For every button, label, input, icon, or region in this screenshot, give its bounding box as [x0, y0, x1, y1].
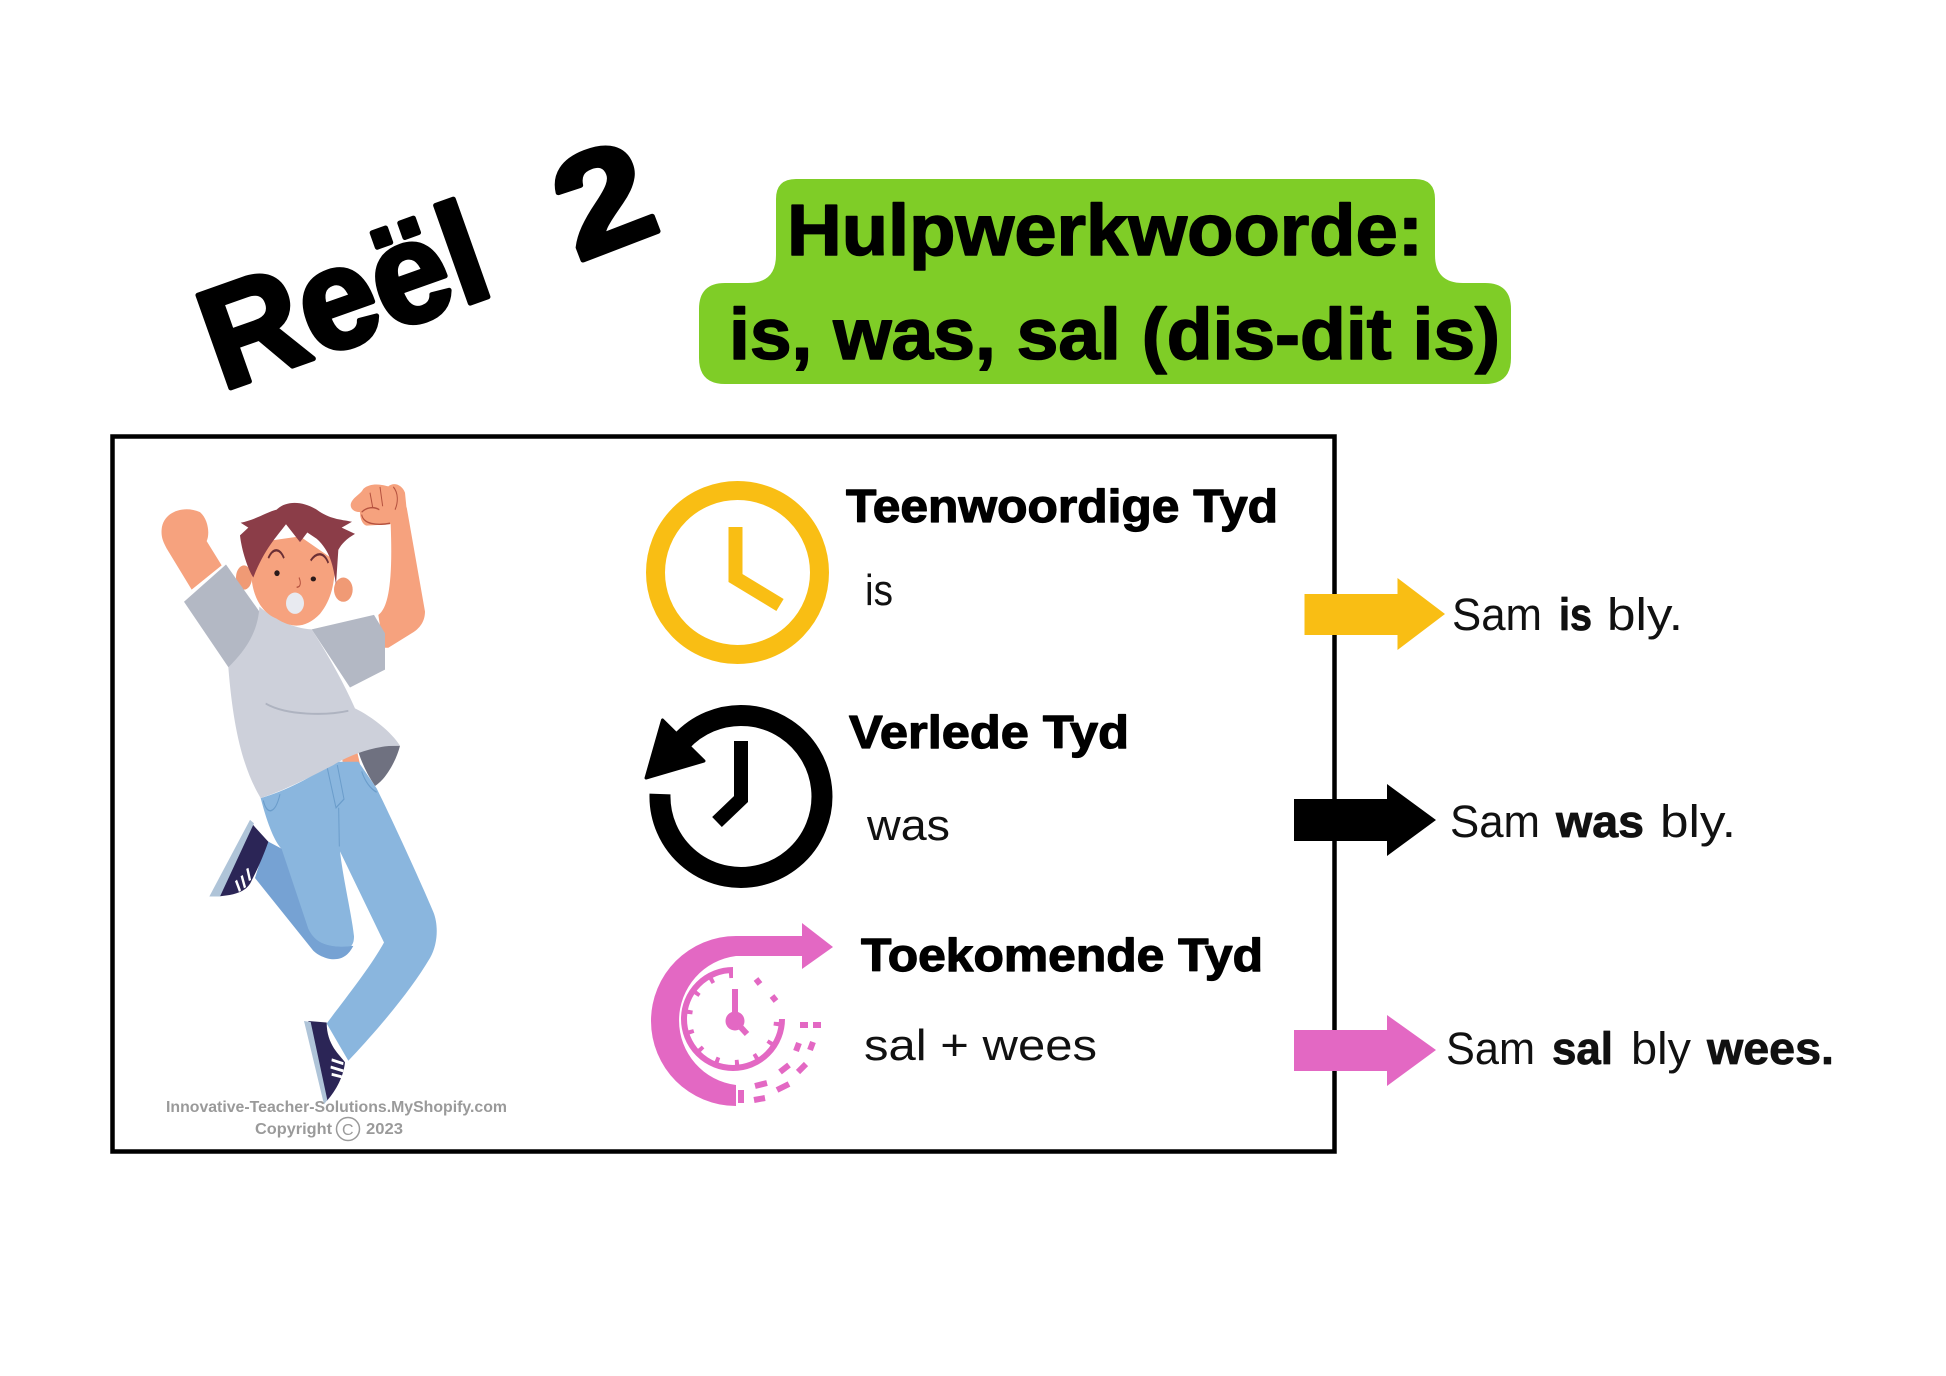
boy eyes — [274, 570, 316, 581]
boy sleeves — [184, 564, 385, 688]
sentence: Sam sal bly wees.: sal — [1552, 1023, 1613, 1074]
shirt wrinkle — [266, 704, 348, 714]
small clock ring — [684, 970, 782, 1068]
boy back leg shadow — [255, 841, 352, 958]
sentence: Sam is bly.: Sam — [1452, 589, 1542, 640]
heading line 1: Hulpwerkwoorde: — [787, 191, 1423, 271]
watermark — [166, 1099, 507, 1140]
boy skin at waist — [342, 750, 360, 765]
boy ears — [236, 565, 353, 602]
sentence: Sam was bly.: bly. — [1660, 796, 1736, 847]
icon: yellow clock (present) — [656, 490, 820, 654]
heading: Toekomende Tyd: Toekomende Tyd — [861, 929, 1263, 981]
small clock hands — [735, 989, 747, 1034]
icon: black rewind clock (past) — [646, 715, 822, 877]
boy eyebrows — [268, 550, 328, 563]
copyright symbol: C — [342, 1122, 354, 1139]
boy face — [251, 536, 335, 626]
arrow: black — [1294, 784, 1436, 856]
value: is: is — [865, 566, 893, 615]
boy front shoe — [304, 1021, 345, 1104]
title word: Reël: Reël — [179, 173, 508, 420]
green badge background — [699, 179, 1511, 384]
sentence: Sam is bly.: is — [1559, 589, 1592, 640]
copyright symbol — [336, 1118, 360, 1140]
illustration: jumping boy — [162, 484, 437, 1104]
boy back shoe — [209, 820, 268, 896]
icon: pink forward clock (future) — [651, 923, 833, 1106]
boy shirt — [228, 607, 400, 798]
dashes — [741, 979, 821, 1103]
boy left arm — [162, 509, 222, 590]
boy back leg knee — [308, 930, 353, 959]
sentence: Sam sal bly wees.: Sam — [1446, 1023, 1535, 1074]
curved forward arrow — [651, 923, 833, 1106]
sentence: Sam was bly.: Sam — [1450, 796, 1540, 847]
boy hair — [240, 503, 355, 585]
heading: Teenwoordige Tyd: Teenwoordige Tyd — [846, 480, 1278, 532]
panel: frame around tenses — [112, 436, 1334, 1152]
sentence: Sam sal bly wees.: bly — [1631, 1023, 1692, 1074]
arrow: pink — [1294, 1015, 1436, 1086]
watermark line: copyright: Copyright — [255, 1121, 333, 1138]
boy mouth — [286, 593, 304, 614]
watermark line: shop address: Innovative-Teacher-Solutions.MyShopify.com — [166, 1099, 507, 1116]
watermark year: 2023 — [366, 1121, 403, 1138]
boy right arm and fist — [351, 484, 425, 648]
jeans seams — [263, 765, 377, 847]
heading line 2: is, was, sal (dis-dit is) — [729, 295, 1500, 375]
heading: Verlede Tyd: Verlede Tyd — [849, 706, 1129, 758]
sentence: Sam sal bly wees.: wees. — [1706, 1023, 1834, 1074]
boy jeans — [261, 762, 437, 1061]
sentence: Sam was bly.: was — [1555, 796, 1644, 847]
value: sal + wees: sal + wees — [864, 1021, 1097, 1070]
title: Reël 2 — [179, 110, 675, 420]
small clock ticks — [689, 975, 777, 1063]
arrow: yellow — [1304, 578, 1445, 650]
value: was: was — [866, 801, 950, 850]
heading badge: Hulpwerkwoorde — [699, 179, 1511, 384]
boy nose — [297, 578, 300, 587]
title number: 2: 2 — [532, 110, 675, 291]
sentence: Sam is bly.: bly. — [1607, 589, 1683, 640]
boy shirt underside — [357, 746, 400, 786]
